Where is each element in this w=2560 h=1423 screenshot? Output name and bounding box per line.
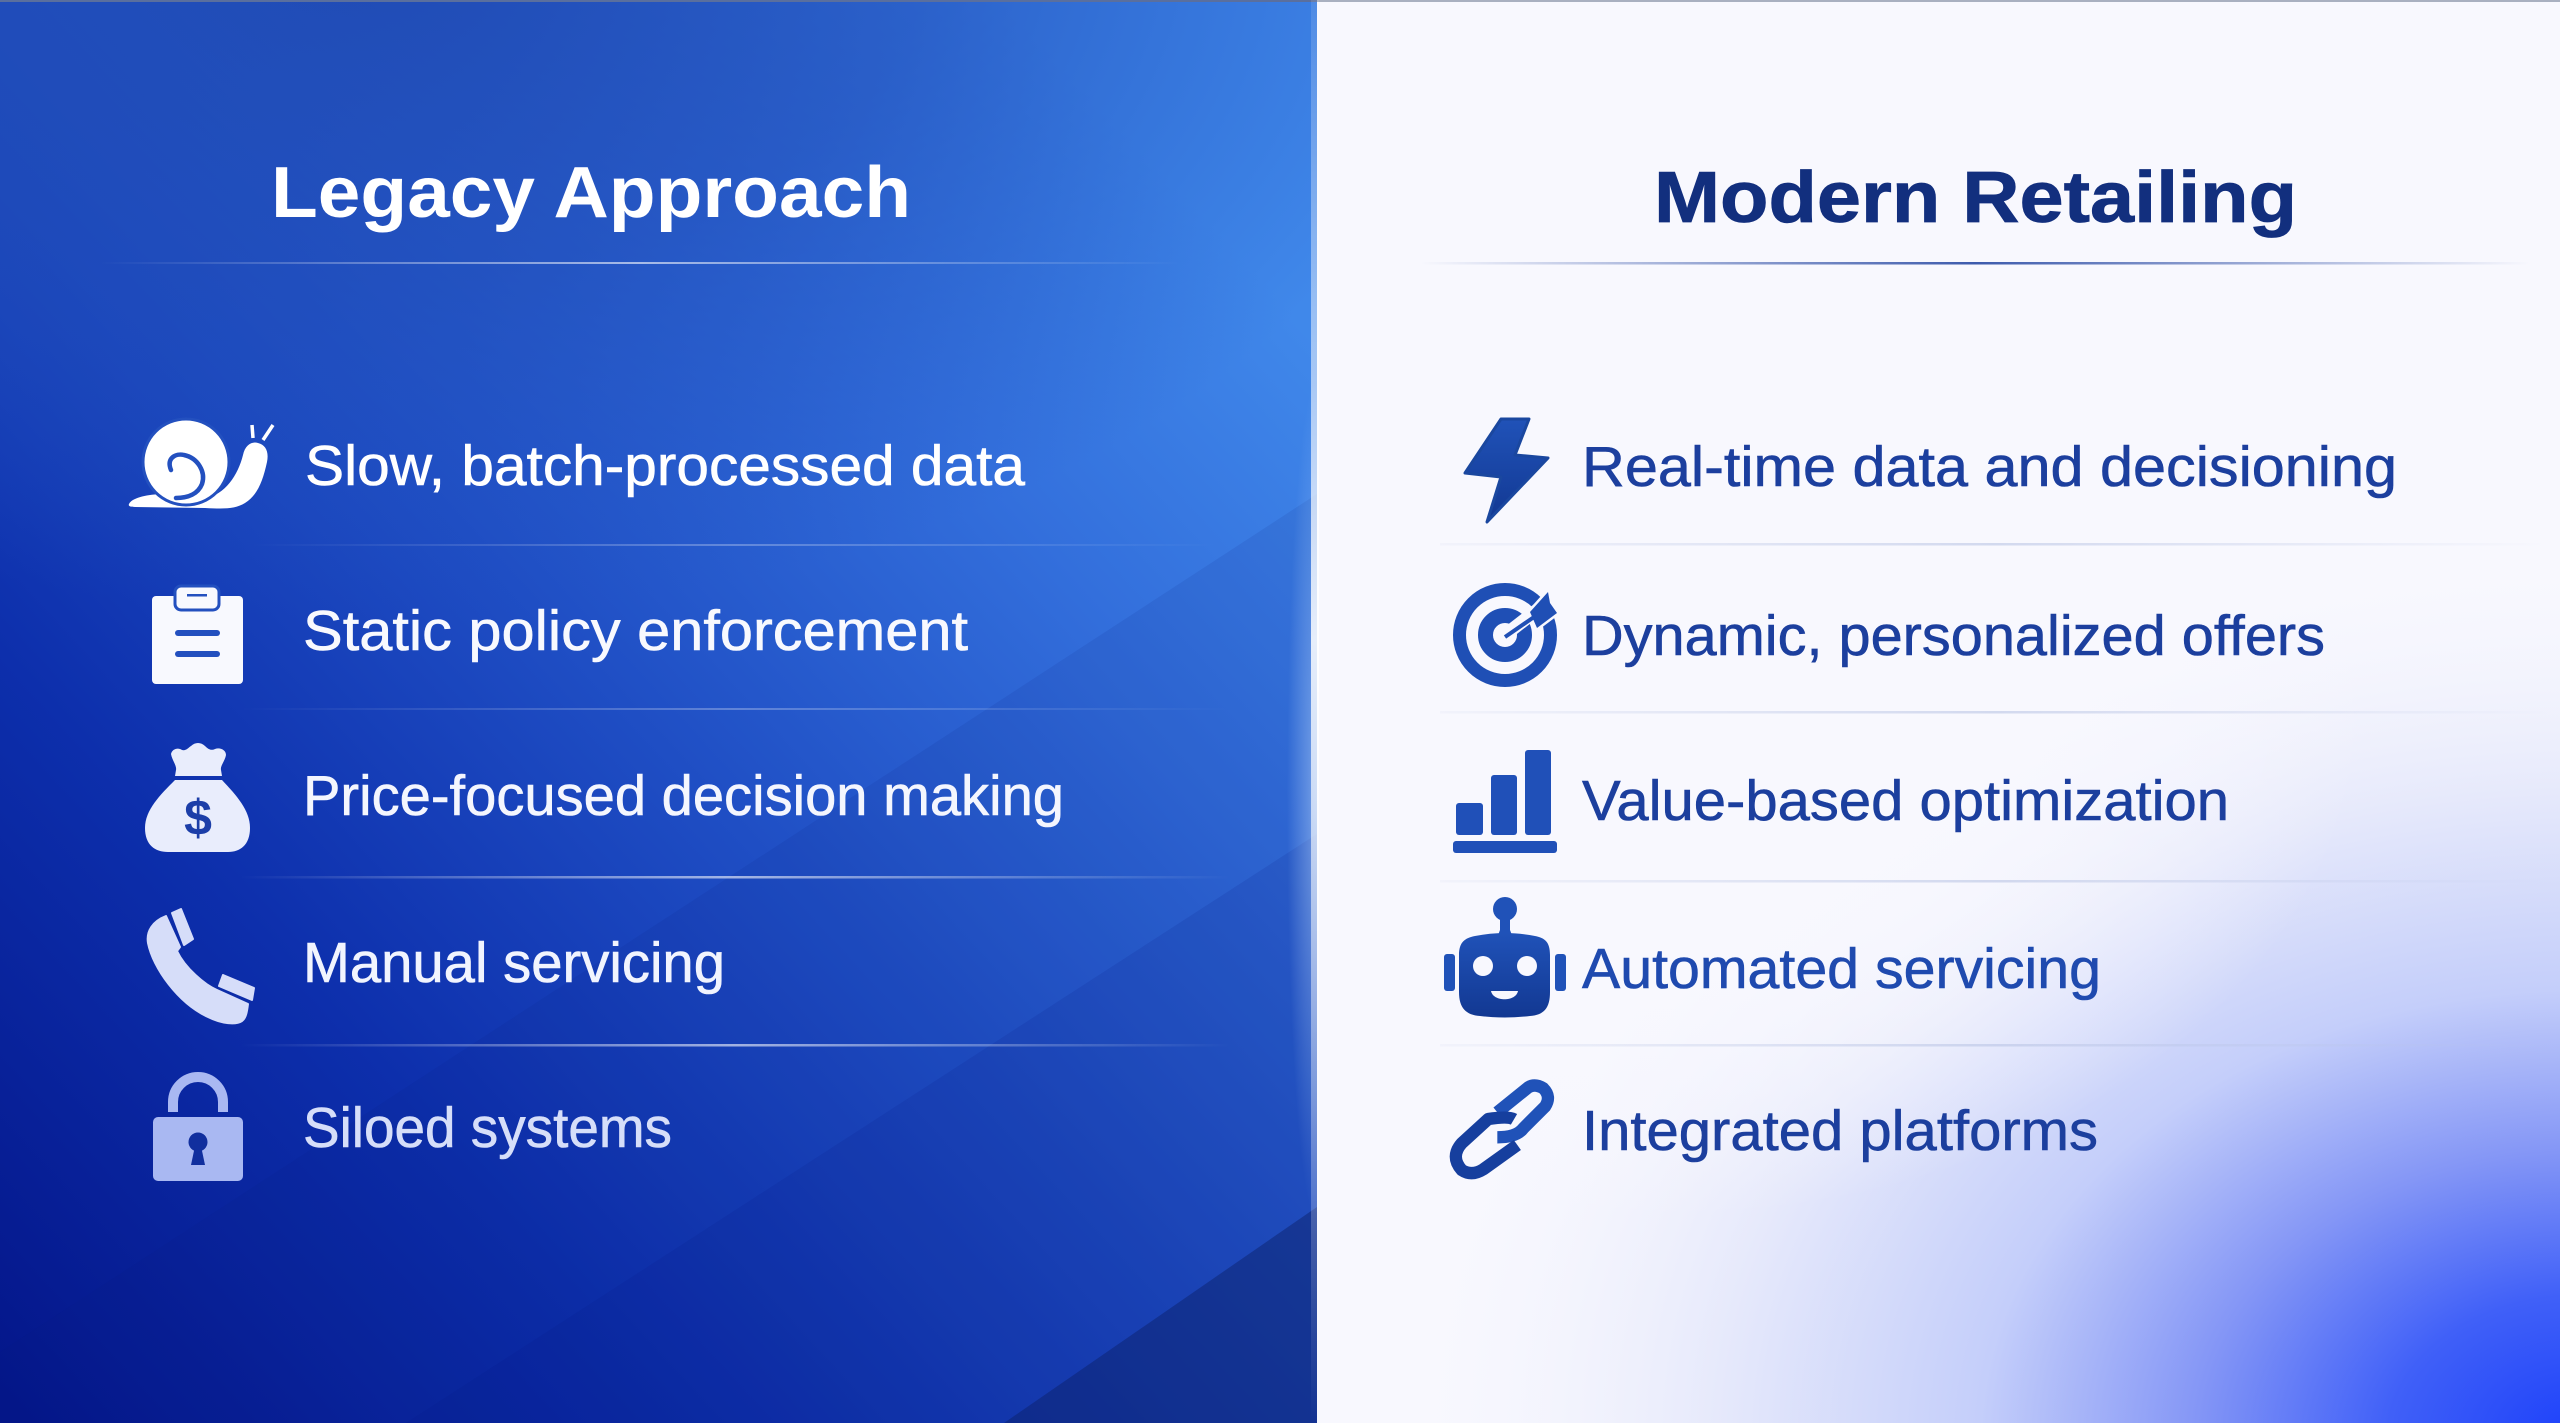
- heading: modern retailing: Modern Retailing: [1654, 158, 2297, 238]
- row text: price-focused: Price-focused decision making: [303, 764, 1064, 828]
- row text: real-time: Real-time data and decisioning: [1582, 435, 2397, 499]
- icon: chain link: [1456, 1086, 1548, 1173]
- row text: static policy: Static policy enforcement: [303, 599, 968, 663]
- icon: snail: [129, 419, 273, 508]
- icon: padlock: [153, 1077, 243, 1181]
- icon: bar chart: [1453, 750, 1557, 853]
- row text: value-based: Value-based optimization: [1582, 769, 2229, 833]
- icon: robot: [1444, 897, 1566, 1018]
- dollar sign: $: [184, 790, 212, 846]
- row text: automated: Automated servicing: [1582, 937, 2101, 1001]
- panel: legacy approach: [0, 0, 1317, 1423]
- modern panel background: [1311, 0, 2560, 1423]
- row text: integrated: Integrated platforms: [1582, 1099, 2098, 1163]
- panel: modern retailing: [1311, 0, 2560, 1423]
- row text: slow data: Slow, batch-processed data: [305, 434, 1025, 498]
- row text: dynamic: Dynamic, personalized offers: [1582, 604, 2325, 668]
- icon: clipboard: [152, 586, 243, 684]
- row text: manual servicing: Manual servicing: [303, 931, 725, 995]
- icon: lightning bolt: [1465, 419, 1548, 522]
- legacy panel background: [0, 0, 1317, 1423]
- row text: siloed systems: Siloed systems: [303, 1096, 672, 1160]
- icon: target with dart: [1460, 590, 1557, 680]
- icon: phone: [148, 909, 254, 1023]
- heading: legacy approach: Legacy Approach: [271, 153, 911, 233]
- icon: money bag: [145, 743, 250, 852]
